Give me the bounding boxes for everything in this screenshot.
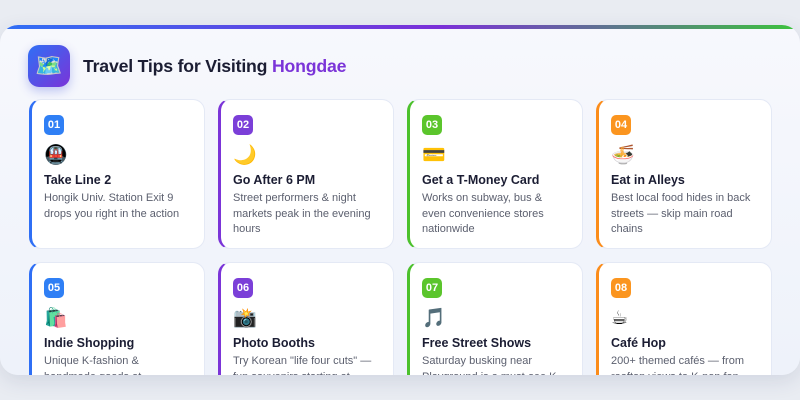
card 08: Café Hop bbox=[611, 336, 666, 350]
card 08 bbox=[596, 262, 772, 400]
icon: map: 🗺️ bbox=[35, 53, 63, 78]
card 05 bbox=[29, 262, 205, 400]
card 03: 03 bbox=[426, 119, 438, 131]
card 01: 01 bbox=[48, 119, 60, 131]
icon: map bbox=[28, 45, 70, 87]
card 01: Take Line 2 bbox=[44, 173, 111, 187]
card 08: 08 bbox=[615, 282, 627, 294]
card 05: 🛍️ bbox=[44, 308, 68, 329]
title: Travel Tips for Visiting Hongdae bbox=[83, 56, 346, 76]
card 07: Free Street Shows bbox=[422, 336, 531, 350]
card 05: 05 bbox=[48, 282, 60, 294]
card 06: Photo Booths bbox=[233, 336, 315, 350]
card 04: Best local food hides in back streets — skip main road chains bbox=[611, 192, 750, 235]
card 04: Eat in Alleys bbox=[611, 173, 685, 187]
card 01: 🚇 bbox=[44, 145, 68, 166]
card 04 bbox=[596, 99, 772, 249]
card 04: 🍜 bbox=[611, 145, 635, 166]
card 01 bbox=[29, 99, 205, 249]
card 03: 💳 bbox=[422, 145, 446, 166]
card 03: Works on subway, bus & even convenience stores nationwide bbox=[422, 192, 544, 235]
card 05: Indie Shopping bbox=[44, 336, 134, 350]
card 06 bbox=[218, 262, 394, 400]
card 02: 02 bbox=[237, 119, 249, 131]
card 03: Get a T-Money Card bbox=[422, 173, 539, 187]
card 02 bbox=[218, 99, 394, 249]
card 06: 06 bbox=[237, 282, 249, 294]
card 03 bbox=[407, 99, 583, 249]
card 08: ☕ bbox=[611, 308, 628, 329]
card 02: 🌙 bbox=[233, 145, 257, 166]
card 07: 07 bbox=[426, 282, 438, 294]
card 02: Go After 6 PM bbox=[233, 173, 315, 187]
card 07 bbox=[407, 262, 583, 400]
card 02: Street performers & night markets peak in the evening hours bbox=[233, 192, 371, 235]
card 01: Hongik Univ. Station Exit 9 drops you right in the action bbox=[44, 192, 179, 220]
card 07: 🎵 bbox=[422, 308, 446, 329]
card 04: 04 bbox=[615, 119, 627, 131]
card 06: 📸 bbox=[233, 308, 257, 329]
